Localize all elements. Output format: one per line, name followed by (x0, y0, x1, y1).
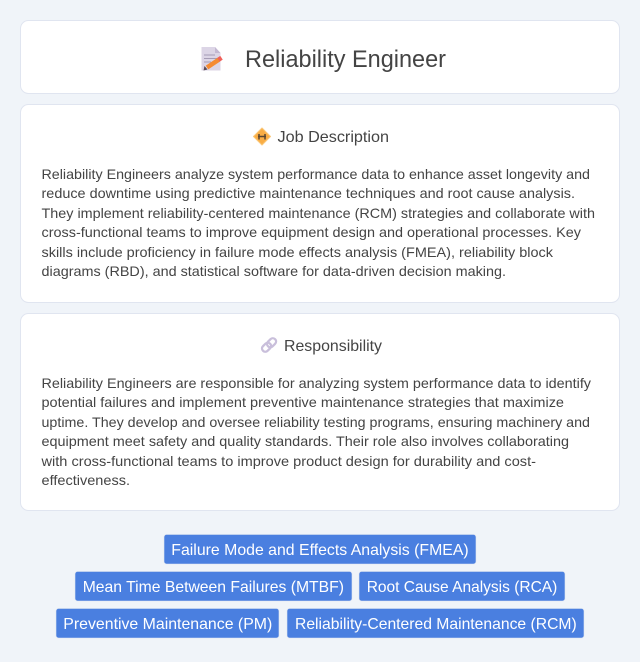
tag: PM (56, 608, 279, 638)
tag: FMEA: Failure Mode and Effects Analysis (FMEA) (171, 542, 469, 559)
heading: job description: Job Description (278, 129, 389, 146)
tag: FMEA (164, 534, 476, 564)
tag: MTBF: Mean Time Between Failures (MTBF) (83, 579, 344, 596)
icon: link (261, 337, 277, 353)
text block: responsibility: effectiveness. (42, 472, 130, 488)
title: Reliability Engineer (245, 46, 446, 73)
panel: responsibility (20, 314, 620, 510)
text block: responsibility: with cross-functional teams to improve product design for durability and cost- (40, 453, 536, 469)
panel: job description (20, 104, 620, 302)
panel: header (20, 20, 620, 94)
heading: responsibility: Responsibility (284, 338, 382, 355)
text block: responsibility: Reliability Engineers are responsible for analyzing system performance data to identify (42, 375, 591, 391)
text block: job description: reduce downtime using predictive maintenance techniques and root cause analysis. (42, 185, 575, 201)
tag: RCA (359, 572, 565, 601)
tag: MTBF (75, 572, 352, 601)
text block: job description: diagrams (RBD), and statistical software for data-driven decision making. (42, 263, 506, 279)
text block: job description: They implement reliability-centered maintenance (RCM) strategies and collaborate with (42, 205, 595, 221)
tag: PM: Preventive Maintenance (PM) (63, 616, 272, 633)
text block: responsibility: uptime. They develop and oversee reliability testing programs, ensuring machinery and (42, 414, 590, 430)
text block: job description: skills include proficiency in failure mode effects analysis (FMEA), reliability block (42, 244, 554, 260)
text block: responsibility: potential failures and implement preventive maintenance strategies that maximize (42, 394, 564, 410)
text block: job description: Reliability Engineers analyze system performance data to enhance asset longevity and (42, 166, 590, 182)
text block: responsibility: equipment meet safety and quality standards. Their role also involves collaborating (42, 433, 569, 449)
icon: orange diamond sign (254, 128, 270, 145)
icon: memo with pencil (202, 47, 222, 70)
tag: RCM: Reliability-Centered Maintenance (RCM) (295, 616, 577, 633)
tag: RCM (287, 608, 584, 638)
text block: responsibility (40, 375, 591, 488)
tag: RCA: Root Cause Analysis (RCA) (367, 579, 557, 596)
text block: job description (42, 166, 595, 279)
text block: job description: cross-functional teams to improve equipment design and operational processes. Key (42, 224, 581, 240)
